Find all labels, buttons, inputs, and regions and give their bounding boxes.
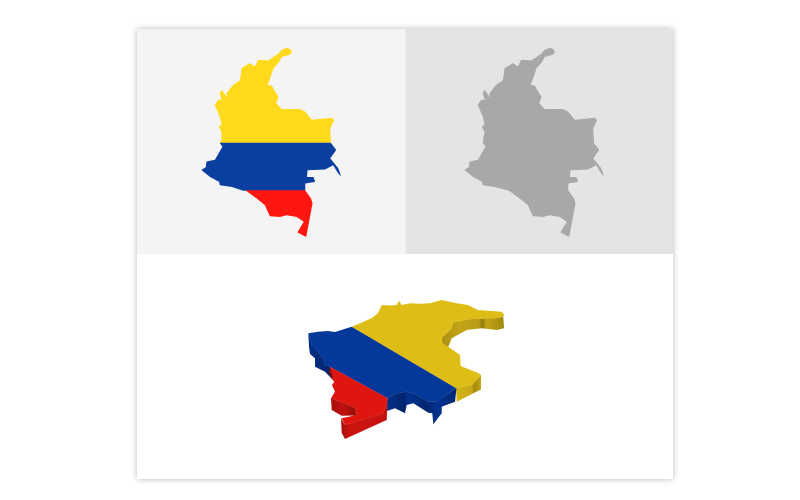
grey silhouette xyxy=(465,48,604,237)
blue right side walls xyxy=(387,388,456,424)
card background xyxy=(137,29,673,479)
blue band xyxy=(202,143,341,190)
yellow band xyxy=(215,48,334,143)
yellow side walls xyxy=(442,317,504,402)
red side walls xyxy=(329,367,388,439)
red top face xyxy=(330,367,388,425)
3D flag map xyxy=(308,300,504,439)
panel: grey silhouette map xyxy=(406,29,673,254)
blue top face xyxy=(308,327,456,402)
red band xyxy=(246,190,312,237)
yellow top face xyxy=(352,300,504,388)
panel: flat flag map xyxy=(137,29,406,254)
blue left side wall xyxy=(308,333,334,378)
